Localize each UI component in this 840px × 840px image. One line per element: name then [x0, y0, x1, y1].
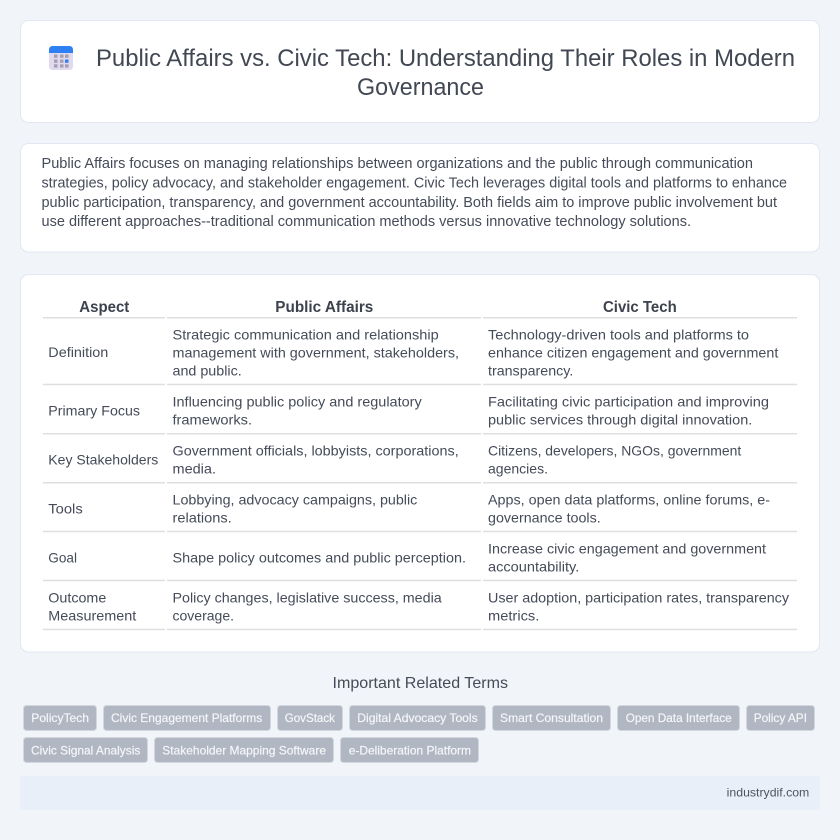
table row: tools: Lobbying, advocacy campaigns, public	[172, 491, 417, 507]
tag: Civic Engagement Platforms: Civic Engagement Platforms	[111, 711, 262, 725]
tag: Policy API	[746, 706, 814, 730]
tag: e-Deliberation Platform: e-Deliberation Platform	[349, 743, 471, 757]
tag: Open Data Interface	[618, 706, 740, 730]
table header row	[43, 299, 797, 318]
table row: definition: transparency.	[488, 362, 573, 378]
table header row: Aspect	[79, 299, 130, 316]
table row: primary focus	[43, 393, 797, 434]
tag: Civic Signal Analysis: Civic Signal Analysis	[31, 743, 140, 757]
title: Governance	[357, 74, 484, 101]
table row: key stakeholders: agencies.	[488, 460, 548, 476]
table row: definition: Definition	[48, 344, 108, 360]
text block: summary	[42, 156, 787, 230]
table row: goal: Increase civic engagement and government	[488, 540, 766, 556]
table row: primary focus: Facilitating civic participation and improving	[488, 393, 769, 409]
table row: primary focus: Influencing public policy and regulatory	[172, 393, 422, 409]
table row: goal	[43, 540, 797, 581]
text block: summary: public participation, transparency, and government accountability. Both fields aim to improve public involvement but	[42, 195, 777, 211]
table row: definition: Strategic communication and relationship	[172, 326, 439, 342]
panel: header	[20, 20, 820, 122]
panel: comparison table	[20, 274, 820, 652]
tag: Civic Signal Analysis	[24, 738, 148, 762]
table row: definition: enhance citizen engagement and government	[488, 344, 778, 360]
heading: important related terms: Important Related Terms	[332, 675, 508, 692]
title: Public Affairs vs. Civic Tech: Understanding Their Roles in Modern	[96, 45, 795, 72]
text block: summary: use different approaches--traditional communication methods versus innovative technology solutions.	[42, 214, 691, 230]
tag: Civic Engagement Platforms	[104, 706, 270, 730]
icon: calendar	[49, 46, 73, 70]
tag: PolicyTech: PolicyTech	[31, 711, 89, 725]
title	[96, 45, 795, 101]
table row: key stakeholders: Key Stakeholders	[48, 451, 158, 467]
tag: Smart Consultation	[492, 706, 610, 730]
tag: Stakeholder Mapping Software	[154, 738, 334, 762]
tag: PolicyTech	[24, 706, 96, 730]
table row: definition: Technology-driven tools and platforms to	[488, 326, 749, 342]
table row: outcome measurement: Outcome	[48, 589, 107, 605]
footer	[20, 776, 820, 810]
table row: primary focus: Primary Focus	[48, 402, 140, 418]
table row: key stakeholders	[43, 442, 797, 484]
table row: outcome measurement: Measurement	[48, 607, 136, 623]
tag: Digital Advocacy Tools	[350, 706, 486, 730]
table row: definition: management with government, stakeholders,	[172, 344, 459, 360]
table row: outcome measurement	[43, 589, 797, 630]
footer: industrydif.com	[727, 786, 809, 800]
table row: definition: and public.	[172, 362, 242, 378]
table row: goal: Goal	[48, 549, 77, 565]
tag: Policy API: Policy API	[754, 711, 807, 725]
table row: key stakeholders: media.	[172, 460, 216, 476]
panel: summary paragraph	[20, 144, 820, 252]
text block: summary: Public Affairs focuses on managing relationships between organizations and the public through communication	[42, 156, 753, 172]
tag: Smart Consultation: Smart Consultation	[500, 711, 603, 725]
table header row: Civic Tech	[603, 299, 677, 316]
tag: Open Data Interface: Open Data Interface	[626, 711, 732, 725]
tag: GovStack	[278, 706, 342, 730]
table row: tools: Apps, open data platforms, online forums, e-	[488, 491, 770, 507]
table row: tools: Tools	[48, 500, 83, 516]
table row: goal: accountability.	[488, 558, 579, 574]
table header row: Public Affairs	[275, 299, 373, 316]
table row: outcome measurement: coverage.	[172, 607, 234, 623]
table row: tools: relations.	[172, 509, 232, 525]
table row: key stakeholders: Government officials, lobbyists, corporations,	[172, 442, 459, 458]
tag: GovStack: GovStack	[285, 711, 336, 725]
panel: related term tags	[24, 706, 814, 762]
table row: tools	[43, 491, 797, 532]
table row: primary focus: frameworks.	[172, 411, 252, 427]
table row: outcome measurement: Policy changes, legislative success, media	[172, 589, 442, 605]
tag: Digital Advocacy Tools: Digital Advocacy Tools	[357, 711, 478, 725]
table row: key stakeholders: Citizens, developers, NGOs, government	[488, 442, 741, 458]
table row: outcome measurement: User adoption, participation rates, transparency	[488, 589, 789, 605]
table row: primary focus: public services through digital innovation.	[488, 411, 752, 427]
table row: tools: governance tools.	[488, 509, 601, 525]
table row: outcome measurement: metrics.	[488, 607, 539, 623]
text block: summary: strategies, policy advocacy, and stakeholder engagement. Civic Tech leverages digital tools and platforms to enhance	[42, 176, 787, 192]
table row: goal: Shape policy outcomes and public perception.	[172, 549, 466, 565]
tag: e-Deliberation Platform	[340, 738, 478, 762]
tag: Stakeholder Mapping Software: Stakeholder Mapping Software	[162, 743, 326, 757]
table row: definition	[43, 326, 797, 385]
